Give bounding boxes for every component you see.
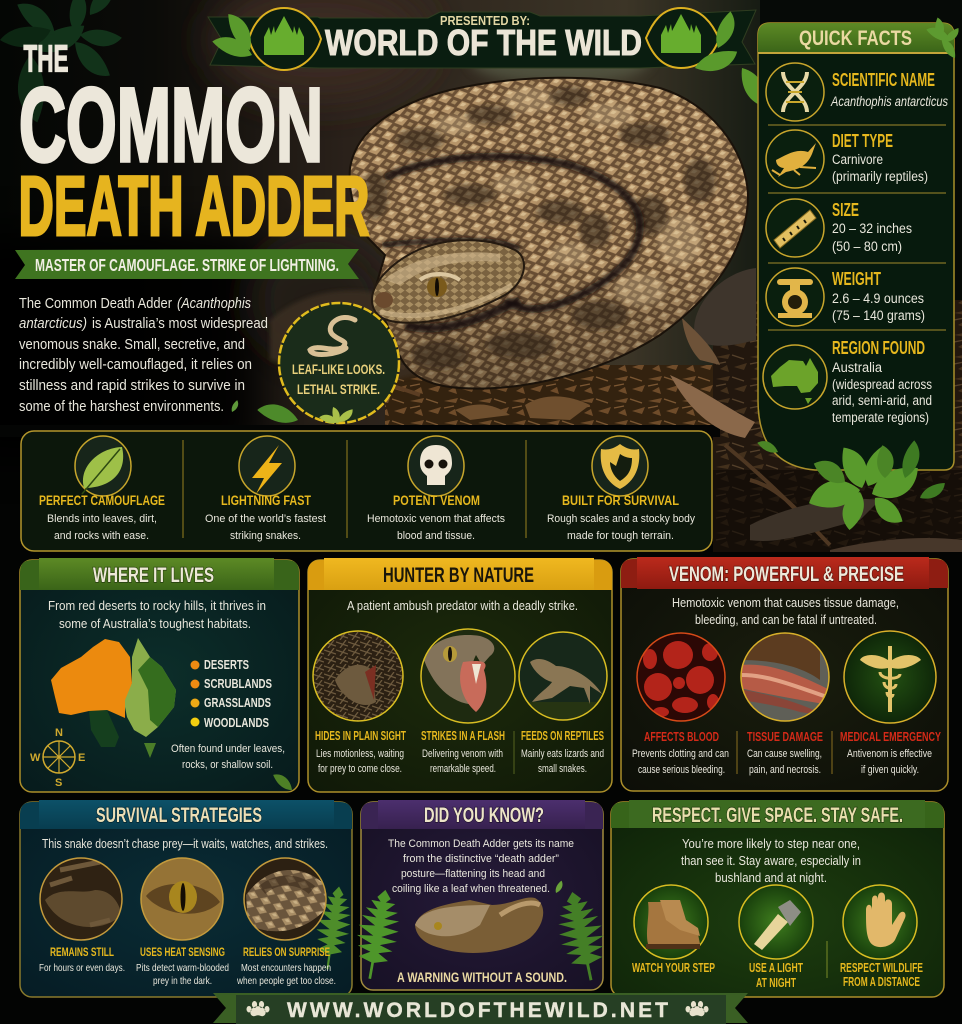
caption: tissue damage: TISSUE DAMAGE xyxy=(747,729,823,744)
fact text xyxy=(388,838,574,895)
scale blotches xyxy=(361,86,716,369)
panel: hunter by nature xyxy=(308,558,612,792)
caption: hides in plain sight: HIDES IN PLAIN SIGHT xyxy=(315,729,406,743)
callout badge: leaf-like looks: LETHAL STRIKE. xyxy=(297,381,380,397)
caption: hides in plain sight: for prey to come close. xyxy=(318,763,402,775)
habitat legend: GRASSLANDS xyxy=(204,695,271,710)
trait: perfect camouflage xyxy=(39,436,165,542)
trait: lightning fast xyxy=(205,436,326,542)
title: COMMON xyxy=(19,67,323,184)
icon: caduceus xyxy=(844,631,936,723)
illustration: coiled death adder xyxy=(270,78,748,389)
caption: tissue damage: Can cause swelling, xyxy=(747,748,822,760)
brand name: WORLD OF THE WILD xyxy=(325,22,642,63)
description: some of Australia’s toughest habitats. xyxy=(59,616,251,631)
website url: WWW.WORLDOFTHEWILD.NET xyxy=(287,999,668,1022)
caption: relies on surprise: when people get too close. xyxy=(236,975,336,987)
panel: venom xyxy=(621,557,948,791)
fact: weight: (75 – 140 grams) xyxy=(832,308,925,323)
callout badge: leaf-like looks xyxy=(257,303,399,431)
caption: uses heat sensing: USES HEAT SENSING xyxy=(140,945,225,959)
caption: uses heat sensing: prey in the dark. xyxy=(153,975,212,987)
photo: hides in plain sight xyxy=(310,630,406,722)
fact text: posture—flattening its head and xyxy=(401,868,545,880)
photo: coiled scales xyxy=(242,856,328,942)
title xyxy=(18,38,369,253)
trait: potent venom: blood and tissue. xyxy=(397,530,475,542)
trait: potent venom: Hemotoxic venom that affects xyxy=(367,513,505,525)
trait: built for survival: made for tough terrain. xyxy=(567,530,674,542)
trait: lightning fast: LIGHTNING FAST xyxy=(221,493,312,508)
heading: SURVIVAL STRATEGIES xyxy=(96,804,262,827)
caption: respect wildlife: RESPECT WILDLIFE xyxy=(840,961,923,975)
caption: affects blood: Prevents clotting and can xyxy=(632,748,729,760)
description: From red deserts to rocky hills, it thrives in xyxy=(48,598,266,613)
footer ribbon xyxy=(213,993,748,1024)
habitat legend: WOODLANDS xyxy=(204,715,269,730)
panel: key traits xyxy=(21,431,712,551)
caption: uses heat sensing: Pits detect warm-blooded xyxy=(136,962,229,974)
fact: diet type: Carnivore xyxy=(832,152,883,167)
icon: fern xyxy=(311,884,355,972)
caption: feeds on reptiles: FEEDS ON REPTILES xyxy=(521,729,604,743)
light scale patches xyxy=(433,88,702,306)
presented by label: PRESENTED BY: xyxy=(440,14,530,28)
intro paragraph: antarcticus) xyxy=(19,316,87,332)
caption: remains still xyxy=(39,945,125,974)
description: You’re more likely to step near one, xyxy=(682,836,860,851)
icon: hand xyxy=(843,885,917,959)
habitat note xyxy=(171,743,285,771)
caption: relies on surprise xyxy=(236,945,336,987)
trait: perfect camouflage: and rocks with ease. xyxy=(54,530,149,542)
fact: diet type: DIET TYPE xyxy=(832,131,893,151)
badge: left tree emblem xyxy=(249,8,321,70)
trait: built for survival: BUILT FOR SURVIVAL xyxy=(562,493,679,508)
fact: region found: (widespread across xyxy=(832,377,932,392)
warning line: A WARNING WITHOUT A SOUND. xyxy=(397,969,567,985)
caption: feeds on reptiles xyxy=(521,729,604,775)
trait: built for survival xyxy=(547,436,695,542)
caption: strikes in a flash: STRIKES IN A FLASH xyxy=(421,729,505,743)
intro paragraph xyxy=(19,296,268,415)
caption: tissue damage xyxy=(747,729,823,776)
foliage cluster xyxy=(757,436,948,531)
icon: paw left xyxy=(247,1001,270,1016)
intro paragraph: The Common Death Adder xyxy=(19,296,172,312)
trait: lightning fast: striking snakes. xyxy=(230,530,301,542)
caption: strikes in a flash: remarkable speed. xyxy=(430,763,496,775)
compass xyxy=(30,727,85,789)
caption: strikes in a flash xyxy=(421,729,505,775)
fact text: from the distinctive “death adder” xyxy=(403,853,559,865)
intro paragraph: is Australia’s most widespread xyxy=(92,316,268,332)
intro paragraph: some of the harshest environments. xyxy=(19,399,224,415)
forest floor debris xyxy=(0,0,962,552)
fact: diet type: (primarily reptiles) xyxy=(832,169,928,184)
fact: scientific name xyxy=(766,63,948,121)
icon: right fern xyxy=(551,887,612,985)
fact: region found: arid, semi-arid, and xyxy=(832,393,932,408)
caption: respect wildlife: FROM A DISTANCE xyxy=(843,975,920,989)
habitat note: rocks, or shallow soil. xyxy=(182,759,273,771)
fact: weight: 2.6 – 4.9 ounces xyxy=(832,291,924,306)
caption: tissue damage: pain, and necrosis. xyxy=(749,764,821,776)
fact: weight xyxy=(766,268,925,326)
description: A patient ambush predator with a deadly strike. xyxy=(347,598,578,613)
caption: remains still: REMAINS STILL xyxy=(50,945,114,959)
heading: DID YOU KNOW? xyxy=(424,804,544,827)
caption: feeds on reptiles: Mainly eats lizards and xyxy=(521,748,604,760)
habitat legend: SCRUBLANDS xyxy=(204,676,272,691)
caption: use a light at night: USE A LIGHT xyxy=(749,961,803,975)
tagline ribbon xyxy=(15,249,359,279)
caption: hides in plain sight: Lies motionless, waiting xyxy=(316,748,404,760)
photo: remains still xyxy=(38,856,124,942)
icon: boots xyxy=(634,885,708,959)
caption: medical emergency: if given quickly. xyxy=(861,764,919,776)
heading: WHERE IT LIVES xyxy=(93,564,214,587)
caption: medical emergency xyxy=(840,729,941,776)
intro paragraph: stillness and rapid strikes to survive in xyxy=(19,378,245,394)
description: than see it. Stay aware, especially in xyxy=(681,853,861,868)
intro paragraph: incredibly well-camouflaged, it relies on xyxy=(19,357,252,373)
fact: size xyxy=(766,199,912,257)
trait: potent venom xyxy=(367,436,505,542)
heading: QUICK FACTS xyxy=(799,27,912,50)
fact: region found: temperate regions) xyxy=(832,410,929,425)
heading: HUNTER BY NATURE xyxy=(383,564,534,587)
intro paragraph: (Acanthophis xyxy=(177,296,251,312)
habitat note: Often found under leaves, xyxy=(171,743,285,755)
icon: left fern xyxy=(350,886,405,982)
caption: relies on surprise: RELIES ON SURPRISE xyxy=(243,945,330,959)
map of Australia xyxy=(51,638,176,758)
panel: quick facts xyxy=(757,17,962,531)
description xyxy=(48,598,266,631)
description: bushland and at night. xyxy=(715,870,827,885)
compass: N xyxy=(55,727,63,739)
trait: perfect camouflage: Blends into leaves, dirt, xyxy=(47,513,157,525)
panel: survival strategies xyxy=(20,800,355,997)
fact: diet type xyxy=(766,130,928,188)
foliage: top left leaves xyxy=(0,0,122,123)
fact: region found: Australia xyxy=(832,360,882,375)
photo: blood cells xyxy=(636,632,726,722)
description: This snake doesn’t chase prey—it waits, watches, and strikes. xyxy=(42,836,328,851)
snake head xyxy=(372,240,524,323)
caption: hides in plain sight xyxy=(315,729,406,775)
fact text: The Common Death Adder gets its name xyxy=(388,838,574,850)
description: Hemotoxic venom that causes tissue damage, xyxy=(672,595,899,610)
photo: tissue damage xyxy=(740,632,830,722)
fact: weight: WEIGHT xyxy=(832,269,881,289)
trait: lightning fast: One of the world’s fastest xyxy=(205,513,326,525)
photo: feeds on reptiles xyxy=(519,632,607,722)
coil creases xyxy=(382,156,640,328)
habitat legend xyxy=(190,657,272,730)
caption: use a light at night xyxy=(749,961,803,990)
panel: safety xyxy=(611,800,944,997)
caption: medical emergency: Antivenom is effective xyxy=(847,748,932,760)
trait: built for survival: Rough scales and a stocky body xyxy=(547,513,695,525)
description xyxy=(681,836,861,885)
icon: flashlight xyxy=(739,885,813,959)
description: bleeding, and can be fatal if untreated. xyxy=(695,612,877,627)
icon: paw right xyxy=(686,1001,709,1016)
caption: uses heat sensing xyxy=(136,945,229,987)
badge: right tree emblem xyxy=(646,8,719,68)
panel: did you know xyxy=(350,800,612,990)
caption: strikes in a flash: Delivering venom with xyxy=(422,748,503,760)
title: THE xyxy=(24,38,68,80)
caption: remains still: For hours or even days. xyxy=(39,962,125,974)
caption: relies on surprise: Most encounters happen xyxy=(241,962,331,974)
title: DEATH ADDER xyxy=(18,159,369,253)
top banner: World of the Wild xyxy=(208,8,772,113)
caption: affects blood: cause serious bleeding. xyxy=(638,764,725,776)
description xyxy=(672,595,899,627)
fact: size: SIZE xyxy=(832,200,859,220)
callout badge: leaf-like looks: LEAF-LIKE LOOKS. xyxy=(292,361,385,377)
trait: potent venom: POTENT VENOM xyxy=(393,493,480,508)
fact text: coiling like a leaf when threatened. xyxy=(392,883,550,895)
panel: where it lives xyxy=(20,558,299,794)
caption: affects blood: AFFECTS BLOOD xyxy=(644,729,719,744)
corner leaves xyxy=(926,17,962,60)
banner leaves xyxy=(211,10,772,113)
caption: use a light at night: AT NIGHT xyxy=(756,976,796,990)
caption: respect wildlife xyxy=(840,961,923,989)
intro paragraph: venomous snake. Small, secretive, and xyxy=(19,337,245,353)
tagline ribbon: MASTER OF CAMOUFLAGE. STRIKE OF LIGHTNING. xyxy=(35,255,339,275)
illustration: flattened snake xyxy=(415,897,543,953)
photo: heat sensing eye xyxy=(140,856,226,942)
photo: strikes in a flash xyxy=(420,628,516,724)
compass: W xyxy=(30,752,41,764)
compass: E xyxy=(78,752,85,764)
caption: watch your step: WATCH YOUR STEP xyxy=(632,961,715,975)
fact: region found xyxy=(763,338,932,425)
caption: feeds on reptiles: small snakes. xyxy=(538,763,587,775)
caption: affects blood xyxy=(632,729,729,776)
compass: S xyxy=(55,777,62,789)
habitat legend: DESERTS xyxy=(204,657,249,672)
fact: size: (50 – 80 cm) xyxy=(832,239,902,254)
trait: perfect camouflage: PERFECT CAMOUFLAGE xyxy=(39,493,165,508)
fact: size: 20 – 32 inches xyxy=(832,221,912,236)
